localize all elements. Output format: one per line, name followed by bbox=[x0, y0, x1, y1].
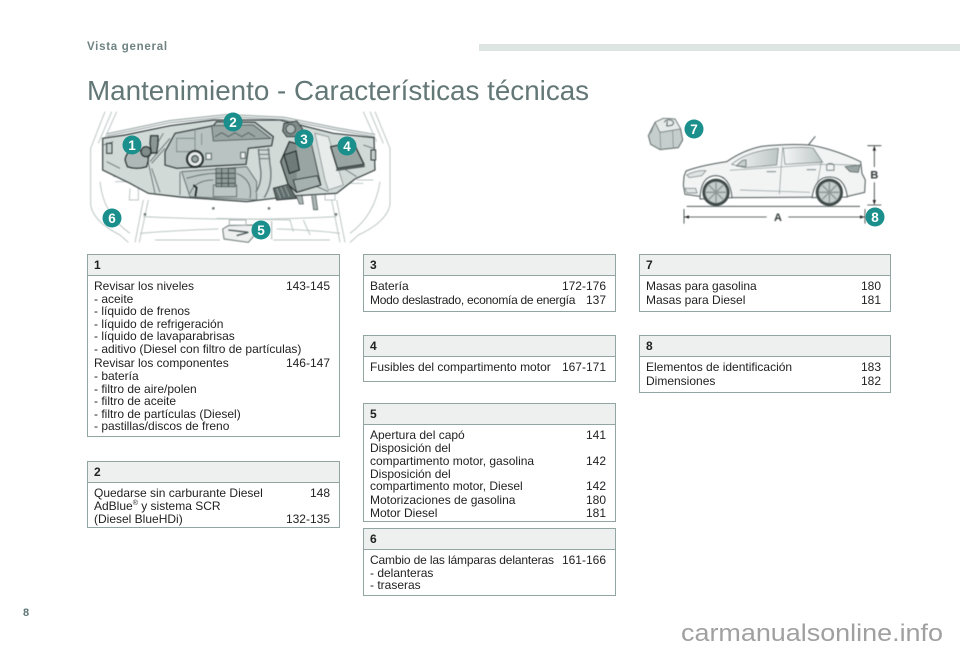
bay detail lines bbox=[103, 133, 373, 195]
panel 2: 2 bbox=[94, 465, 101, 479]
ground line bbox=[687, 205, 860, 208]
panel 1: 1 bbox=[94, 258, 101, 272]
panel 5: Disposición del bbox=[370, 441, 451, 455]
badge 2 bbox=[224, 112, 242, 132]
panel 5: 181 bbox=[586, 506, 606, 520]
panel 5: Apertura del capó bbox=[370, 428, 465, 442]
panel 5: 142 bbox=[586, 479, 606, 493]
panel 1: - pastillas/discos de freno bbox=[94, 419, 229, 433]
badge 1: 1 bbox=[128, 138, 136, 153]
panel 1: - batería bbox=[94, 369, 139, 383]
fuse box bbox=[315, 133, 343, 190]
panel 8: Dimensiones bbox=[646, 374, 715, 388]
hood seal bbox=[107, 116, 375, 136]
panel 7: 7 bbox=[646, 258, 653, 272]
badge 4 bbox=[338, 136, 356, 156]
header bar bbox=[479, 44, 960, 51]
panel 7: 181 bbox=[861, 293, 881, 307]
filler cap bbox=[283, 121, 303, 137]
badge 5 bbox=[252, 220, 270, 240]
panel 2: AdBlue® y sistema SCR bbox=[94, 499, 221, 513]
dimension A: A bbox=[774, 212, 782, 224]
panel 6: 161-166 bbox=[562, 553, 606, 567]
wheels bbox=[700, 176, 732, 199]
panel 6 bbox=[363, 528, 616, 596]
panel 4: 4 bbox=[370, 339, 377, 353]
badge 6 bbox=[102, 208, 122, 228]
panel 1: - filtro de aceite bbox=[94, 394, 176, 408]
dimension B: B bbox=[870, 170, 878, 182]
page number: 8 bbox=[23, 607, 29, 619]
panel 3 bbox=[363, 254, 616, 312]
panel 2: 132-135 bbox=[286, 512, 330, 526]
antenna bbox=[808, 136, 815, 145]
panel 3: 3 bbox=[370, 258, 377, 272]
panel 6: - traseras bbox=[370, 578, 421, 592]
panel 5: Motorizaciones de gasolina bbox=[370, 493, 515, 507]
panel 5: 142 bbox=[586, 454, 606, 468]
body bbox=[683, 145, 865, 198]
panel 2: (Diesel BlueHDi) bbox=[94, 512, 183, 526]
panel 6: Cambio de las lámparas delanteras bbox=[370, 553, 554, 567]
bolts bbox=[212, 207, 215, 210]
panel 2: Quedarse sin carburante Diesel bbox=[94, 486, 263, 500]
badge 2: 2 bbox=[229, 115, 237, 130]
panel 1: Revisar los niveles bbox=[94, 279, 194, 293]
panel 5: 141 bbox=[586, 428, 606, 442]
panel 5: 180 bbox=[586, 493, 606, 507]
panel 8: 182 bbox=[861, 374, 881, 388]
panel 1: 143-145 bbox=[286, 279, 330, 293]
section label: Vista general bbox=[87, 41, 168, 53]
panel 5: compartimento motor, Diesel bbox=[370, 479, 523, 493]
panel 7: Masas para gasolina bbox=[646, 279, 757, 293]
panel 8: 8 bbox=[646, 339, 653, 353]
reservoir bbox=[125, 150, 148, 168]
panel 8 bbox=[639, 335, 891, 393]
engine compartment bbox=[103, 120, 375, 202]
door lines bbox=[730, 147, 857, 197]
panel 1: 146-147 bbox=[286, 356, 330, 370]
panel 1: Revisar los componentes bbox=[94, 356, 229, 370]
hood and bumper outline bbox=[91, 112, 390, 242]
panel 3: Modo deslastrado, economía de energía bbox=[370, 293, 575, 307]
panel 5: 5 bbox=[370, 407, 377, 421]
panel 1 bbox=[87, 254, 340, 437]
panel 2 bbox=[87, 461, 340, 528]
badge 7: 7 bbox=[690, 122, 698, 137]
engine bay illustration bbox=[90, 111, 391, 244]
panel 4: Fusibles del compartimento motor bbox=[370, 360, 551, 374]
engine cover bbox=[165, 122, 273, 168]
panel 2: 148 bbox=[310, 486, 330, 500]
watermark: carmanualsonline.info bbox=[681, 620, 943, 647]
windows bbox=[732, 148, 778, 168]
panel 1: - líquido de frenos bbox=[94, 304, 190, 318]
panel 5: compartimento motor, gasolina bbox=[370, 454, 534, 468]
panel 6: - delanteras bbox=[370, 566, 433, 580]
panel 3: 137 bbox=[586, 293, 606, 307]
panel 1: - filtro de aire/polen bbox=[94, 382, 197, 396]
badge 8 bbox=[866, 208, 884, 226]
panel 4 bbox=[363, 335, 616, 382]
panel 1: - líquido de refrigeración bbox=[94, 317, 223, 331]
badge 3: 3 bbox=[300, 132, 308, 147]
panel 5: Disposición del bbox=[370, 467, 451, 481]
dimension B bbox=[867, 146, 881, 205]
badge 4: 4 bbox=[343, 139, 351, 154]
title: Mantenimiento - Características técnicas bbox=[87, 75, 589, 106]
panel 1: - aceite bbox=[94, 292, 133, 306]
car side view with dimensions bbox=[682, 136, 882, 224]
lower engine bbox=[182, 167, 257, 200]
panel 3: 172-176 bbox=[562, 279, 606, 293]
panel 5 bbox=[363, 403, 616, 522]
wheel nut illustration bbox=[647, 117, 684, 151]
badge 7 bbox=[684, 120, 704, 138]
panel 7: Masas para Diesel bbox=[646, 293, 745, 307]
panel 8: Elementos de identificación bbox=[646, 360, 792, 374]
badge 5: 5 bbox=[257, 223, 265, 238]
radiator module bbox=[223, 225, 253, 242]
badge 6: 6 bbox=[108, 211, 116, 226]
panel 7: 180 bbox=[861, 279, 881, 293]
badge 1 bbox=[122, 136, 142, 154]
panel 3: Batería bbox=[370, 279, 409, 293]
panel 1: - filtro de partículas (Diesel) bbox=[94, 407, 241, 421]
panel 1: - aditivo (Diesel con filtro de partículas) bbox=[94, 342, 301, 356]
panel 8: 183 bbox=[861, 360, 881, 374]
panel 4: 167-171 bbox=[562, 360, 606, 374]
panel 1: - líquido de lavaparabrisas bbox=[94, 329, 235, 343]
badge 3 bbox=[294, 130, 314, 148]
panel 5: Motor Diesel bbox=[370, 506, 437, 520]
panel 6: 6 bbox=[370, 532, 377, 546]
dimension A bbox=[684, 209, 865, 224]
battery bbox=[281, 138, 321, 192]
hose bbox=[260, 148, 266, 195]
panel 7 bbox=[639, 254, 891, 312]
badge 8: 8 bbox=[871, 210, 879, 225]
